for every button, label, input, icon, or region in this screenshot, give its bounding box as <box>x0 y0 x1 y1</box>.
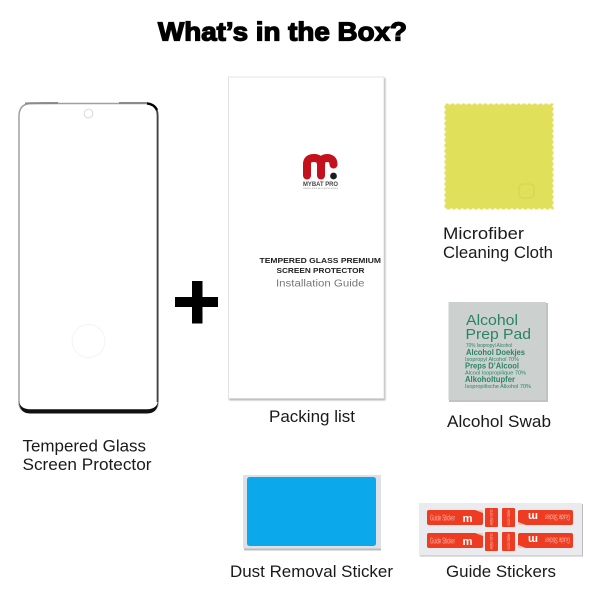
icon: MyBat Pro logo: MYBAT PRO <box>303 181 338 188</box>
icon: alcohol prep pad: Alcool Isopropilique 70% <box>465 370 527 376</box>
sticker: bottom right: m <box>528 533 538 545</box>
sticker: tab captions <box>489 509 511 550</box>
sticker: small tabs <box>485 508 515 551</box>
sticker: top left <box>427 510 483 525</box>
label: tempered glass screen protector: Screen Protector <box>22 456 152 474</box>
panel: packing list booklet <box>228 77 386 400</box>
label: tempered glass screen protector: Tempered Glass <box>22 438 146 456</box>
label: guide stickers: Guide Stickers <box>446 563 556 581</box>
sticker: top right: m <box>528 510 538 522</box>
booklet heading <box>260 256 381 275</box>
booklet heading: SCREEN PROTECTOR <box>276 266 365 275</box>
sticker: top right: Guide Sticker <box>545 512 570 522</box>
sticker: top left: m <box>462 513 473 525</box>
sticker: tab captions: Guide Sticker <box>489 534 494 550</box>
sticker: bottom right <box>518 533 573 548</box>
label: alcohol swab: Alcohol Swab <box>447 413 551 431</box>
label: tempered glass screen protector <box>22 438 152 474</box>
icon: microfiber cloth <box>446 104 552 208</box>
icon: alcohol prep pad: Alcohol <box>466 313 518 329</box>
sticker: bottom left: m <box>462 536 473 548</box>
booklet heading: TEMPERED GLASS PREMIUM <box>260 256 381 265</box>
icon: dust removal sticker <box>243 475 381 550</box>
icon: MyBat Pro logo <box>303 158 339 190</box>
sticker: bottom right: Guide Sticker <box>545 536 570 544</box>
icon: alcohol prep pad: 70% Isopropyl Alcohol <box>466 343 512 349</box>
icon: MyBat Pro logo: WIRELESS ACCESSORIES <box>303 187 339 190</box>
icon: alcohol prep pad: Isopropilische Alkohol 70% <box>465 384 532 390</box>
icon: tempered glass screen protector <box>19 103 158 414</box>
icon: alcohol prep pad: Alcohol Doekjes <box>466 348 526 357</box>
icon: alcohol prep pad: Preps D’Alcool <box>465 362 519 370</box>
booklet subheading: Installation Guide <box>276 278 365 290</box>
icon: plus sign <box>175 281 218 324</box>
label: packing list: Packing list <box>269 408 355 426</box>
label: dust removal sticker: Dust Removal Sticker <box>230 563 394 581</box>
icon: alcohol prep pad: Alkoholtupfer <box>465 375 515 384</box>
sticker: top right <box>518 510 573 525</box>
label: microfiber cleaning cloth: Microfiber <box>443 225 525 243</box>
sticker: bottom left: Guide Sticker <box>430 536 455 546</box>
sticker: tab captions: Guide Sticker <box>506 533 511 550</box>
icon: alcohol prep pad <box>448 302 548 402</box>
sticker: tab captions: Guide Sticker <box>489 510 494 526</box>
title: What’s in the Box? <box>158 16 407 46</box>
icon: guide stickers sheet <box>419 503 583 556</box>
label: microfiber cleaning cloth <box>443 225 553 262</box>
label: microfiber cleaning cloth: Cleaning Cloth <box>443 244 553 262</box>
icon: alcohol prep pad: Isopropyl Alcohol 70% <box>465 357 520 363</box>
sticker: bottom left <box>427 533 483 548</box>
icon: alcohol prep pad: Prep Pad <box>466 327 531 343</box>
sticker: top left: Guide Sticker <box>430 514 455 522</box>
sticker: tab captions: Guide Sticker <box>506 509 511 526</box>
